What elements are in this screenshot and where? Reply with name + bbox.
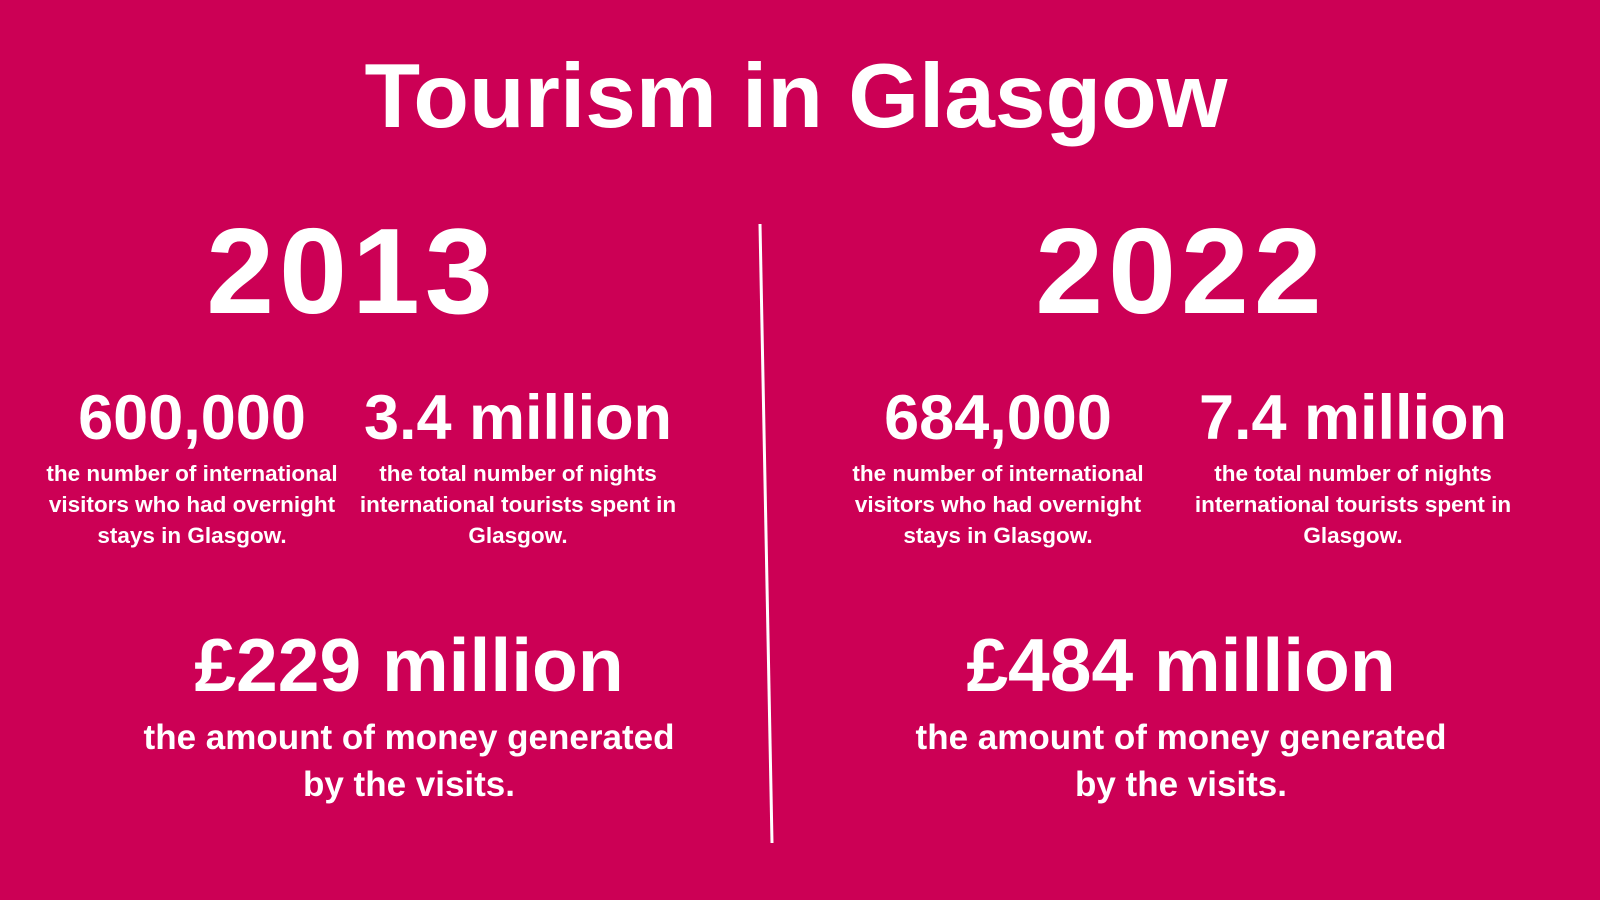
stat: visitors 2022: 684,000 (884, 383, 1112, 453)
title: Tourism in Glasgow (365, 46, 1227, 147)
stat: money 2022: by the visits. (1075, 765, 1287, 804)
stat: nights 2022: 7.4 million (1199, 383, 1507, 453)
stat: visitors 2013: stays in Glasgow. (97, 523, 287, 548)
stat: nights 2013: international tourists spent in (360, 492, 676, 517)
stat: money 2022: £484 million (966, 623, 1396, 707)
stat: visitors 2022: visitors who had overnight (855, 492, 1141, 517)
stat: nights 2022 (1195, 383, 1511, 548)
stat: money 2022 (916, 623, 1446, 804)
stat: visitors 2013: 600,000 (78, 383, 306, 453)
stat: nights 2013: 3.4 million (364, 383, 672, 453)
stat: nights 2022: international tourists spent in (1195, 492, 1511, 517)
stat: nights 2013 (360, 383, 676, 548)
stat: money 2013: the amount of money generated (144, 718, 674, 757)
stat: visitors 2022: stays in Glasgow. (903, 523, 1093, 548)
stat: money 2013: by the visits. (303, 765, 515, 804)
stat: nights 2013: the total number of nights (379, 461, 657, 486)
stat: visitors 2013: visitors who had overnight (49, 492, 335, 517)
year 2022: 2022 (1035, 203, 1327, 339)
stat: nights 2013: Glasgow. (468, 523, 568, 548)
panel: 2022 (852, 203, 1511, 804)
stat: money 2013 (144, 623, 674, 804)
stat: visitors 2013: the number of international (46, 461, 338, 486)
stat: visitors 2013 (46, 383, 338, 548)
stat: money 2013: £229 million (194, 623, 624, 707)
year 2013: 2013 (206, 203, 498, 339)
stat: nights 2022: the total number of nights (1214, 461, 1492, 486)
stat: money 2022: the amount of money generated (916, 718, 1446, 757)
panel: 2013 (46, 203, 676, 804)
stat: visitors 2022 (852, 383, 1144, 548)
stat: nights 2022: Glasgow. (1303, 523, 1403, 548)
stat: visitors 2022: the number of international (852, 461, 1144, 486)
